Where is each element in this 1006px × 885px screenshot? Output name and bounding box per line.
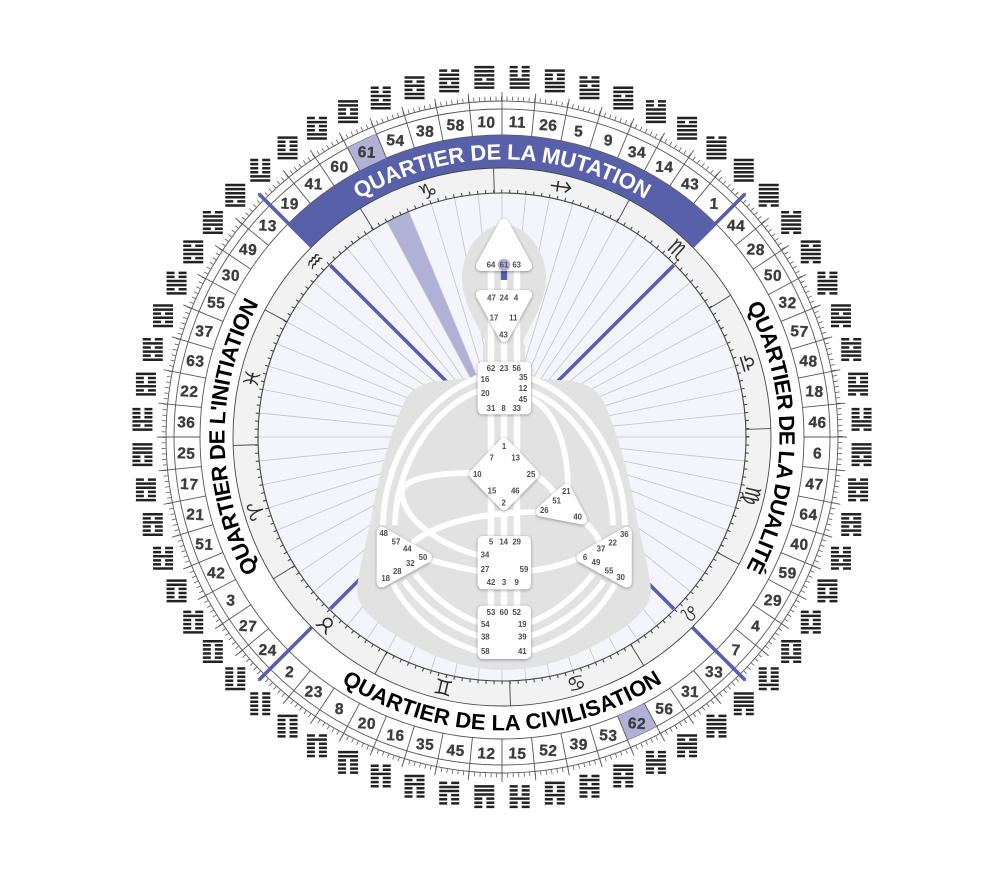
gate number ring: 59 <box>778 565 797 583</box>
hexagram 60 <box>307 118 327 138</box>
heading: quartier de la civilisation: QUARTIER DE LA CIVILISATION <box>344 670 662 730</box>
gate number ring: 54 <box>386 132 405 150</box>
center: throat: 8 <box>501 404 506 413</box>
inner radial lines <box>258 193 746 681</box>
hexagram 62 <box>646 752 666 773</box>
zodiac glyphs: ♊︎ <box>432 673 455 701</box>
center: ego: 26 <box>540 506 549 515</box>
gate number ring: 2 <box>285 664 295 681</box>
panel: mutation quarter band <box>288 135 716 247</box>
gate number ring: 24 <box>258 642 277 660</box>
hexagram 24 <box>225 669 245 689</box>
zodiac glyphs: ♐︎ <box>545 172 576 202</box>
gate number ring: 3 <box>226 592 236 610</box>
center: solar plexus <box>582 530 629 582</box>
center: G: 7 <box>490 453 494 462</box>
center: solar plexus: 55 <box>605 566 614 575</box>
zodiac sign boundaries <box>233 168 771 706</box>
hexagram 59 <box>817 581 837 601</box>
center: solar plexus: 37 <box>597 544 605 553</box>
hexagram 1 <box>734 160 754 181</box>
hexagram 6 <box>852 444 872 465</box>
center: spleen: 28 <box>393 567 402 576</box>
gate number ring: 20 <box>357 715 376 733</box>
hexagram 32 <box>817 273 837 293</box>
hexagram 35 <box>405 776 425 796</box>
hexagram 15 <box>510 786 530 807</box>
zodiac glyphs: ♌︎ <box>674 598 704 628</box>
gate number ring: 10 <box>477 114 496 132</box>
gate number ring: 17 <box>180 476 199 494</box>
gate number ring: 52 <box>539 742 558 760</box>
center: spleen: 57 <box>392 537 400 546</box>
body silhouette <box>357 224 651 670</box>
gate number ring: 12 <box>477 745 496 763</box>
gate number ring: 57 <box>790 323 809 341</box>
gate number ring: 50 <box>763 267 783 285</box>
hexagram 57 <box>831 305 851 326</box>
center: throat: 56 <box>512 364 522 373</box>
hexagram 56 <box>677 736 697 756</box>
center: G: 10 <box>473 470 482 479</box>
channels <box>383 260 625 651</box>
gate number ring: 60 <box>330 158 349 176</box>
hexagram 22 <box>136 374 156 394</box>
heading: quartier de la mutation: QUARTIER DE LA MUTATION <box>354 144 652 198</box>
center: spleen <box>379 529 428 583</box>
center: ego: 40 <box>573 512 583 521</box>
center: root: 38 <box>481 632 490 641</box>
gate number ring: 4 <box>751 618 761 635</box>
hexagram 49 <box>203 212 223 233</box>
zodiac glyphs: ♈︎ <box>242 499 271 524</box>
gate number ring: 47 <box>805 476 824 494</box>
zodiac glyphs: ♍︎ <box>738 484 766 507</box>
center: solar plexus: 6 <box>583 553 588 562</box>
gate number ring: 34 <box>627 144 647 162</box>
gate 61 activation <box>501 270 507 280</box>
center: ego <box>540 487 583 521</box>
center: sacral: 34 <box>481 550 490 559</box>
hexagram 18 <box>848 374 868 394</box>
hexagram 55 <box>167 273 187 293</box>
center: head: 64 <box>487 261 496 270</box>
gate number ring: 55 <box>207 294 226 312</box>
center: root: 19 <box>518 620 527 629</box>
center: root: 52 <box>512 608 522 617</box>
center: sacral: 42 <box>487 578 496 587</box>
gate number ring <box>177 114 827 763</box>
hexagram 5 <box>579 78 599 98</box>
gate number ring: 46 <box>808 414 827 432</box>
center: solar plexus: 30 <box>616 573 626 582</box>
gate number ring: 28 <box>746 241 765 259</box>
center: head: 63 <box>512 261 522 270</box>
hexagram 39 <box>579 776 599 796</box>
center: ajna: 11 <box>509 313 518 322</box>
heading: quartier de la dualité: QUARTIER DE LA DUALITÉ <box>746 302 795 575</box>
hexagram 63 <box>143 339 163 360</box>
hexagram 27 <box>203 641 223 662</box>
center: head: 61 <box>500 261 509 270</box>
zodiac ring <box>233 168 771 706</box>
gate number ring: 32 <box>778 294 797 312</box>
center: G: 13 <box>511 453 521 462</box>
hexagram 21 <box>143 514 163 535</box>
gate number ring: 48 <box>799 353 818 371</box>
gate number ring: 14 <box>655 158 674 176</box>
gate number ring: 62 <box>627 715 647 733</box>
zodiac glyphs: ♒︎ <box>300 246 330 276</box>
gate number ring: 11 <box>508 114 527 132</box>
center: root: 58 <box>481 647 490 656</box>
center: root: 60 <box>500 608 509 617</box>
inner disc <box>258 193 746 681</box>
hexagram 31 <box>706 716 726 736</box>
center: sacral <box>478 536 531 589</box>
zodiac glyphs <box>238 172 766 701</box>
gate number ring: 43 <box>681 176 700 194</box>
center: ajna: 4 <box>514 293 519 302</box>
hexagram 25 <box>132 444 152 465</box>
gate number ring: 6 <box>813 445 823 463</box>
hexagram 7 <box>759 669 779 689</box>
gate number ring: 36 <box>177 414 196 432</box>
hexagram 40 <box>831 548 851 569</box>
hexagram 14 <box>677 118 697 138</box>
hexagram 34 <box>646 101 666 122</box>
center: G: 15 <box>488 486 497 495</box>
hexagram 47 <box>848 480 868 500</box>
hexagram 61 <box>338 101 358 122</box>
hexagram 52 <box>545 783 565 803</box>
gate number ring: 64 <box>799 506 818 524</box>
center: throat: 23 <box>500 364 509 373</box>
hexagram 46 <box>852 409 872 430</box>
gate number ring: 13 <box>258 217 277 235</box>
gate number ring: 53 <box>599 727 618 745</box>
hexagram 17 <box>136 480 156 500</box>
hexagram ring <box>132 67 872 807</box>
gate number ring: 51 <box>195 536 214 554</box>
zodiac glyphs: ♎︎ <box>733 350 762 375</box>
center: sacral: 5 <box>489 537 494 546</box>
center: spleen: 32 <box>406 559 415 568</box>
center: ajna <box>481 293 527 339</box>
center: sacral: 59 <box>520 565 529 574</box>
center: root: 53 <box>487 608 496 617</box>
center: solar plexus: 22 <box>608 538 618 547</box>
gate number ring: 49 <box>239 241 258 259</box>
gate number ring: 25 <box>177 445 196 463</box>
center: throat: 31 <box>487 404 496 413</box>
zodiac glyphs: ♑︎ <box>415 177 440 206</box>
highlighted cell: gate 62 <box>615 702 657 741</box>
gate number ring: 35 <box>416 736 435 754</box>
hexagram 42 <box>167 581 187 601</box>
gate number ring: 31 <box>681 683 700 701</box>
center: G <box>473 442 536 507</box>
gate number ring: 40 <box>790 536 809 554</box>
center: solar plexus: 36 <box>620 530 629 539</box>
gate number ring: 61 <box>357 144 376 162</box>
hexagram 36 <box>132 409 152 430</box>
gate number ring: 63 <box>186 353 205 371</box>
hexagram 51 <box>153 548 173 569</box>
center: root: 54 <box>481 620 490 629</box>
hexagram 48 <box>841 339 861 360</box>
center: ego: 51 <box>552 496 562 505</box>
hexagram 4 <box>781 641 801 662</box>
hexagram 38 <box>405 78 425 98</box>
center: throat: 12 <box>519 384 528 393</box>
center: root: 39 <box>518 632 527 641</box>
hexagram 26 <box>545 71 565 91</box>
gate dividers <box>157 92 847 782</box>
gate 61 wedge <box>387 212 502 437</box>
gate number ring: 18 <box>805 383 824 401</box>
hexagram 45 <box>439 783 459 803</box>
center: sacral: 3 <box>502 578 507 587</box>
gate number ring: 19 <box>280 195 299 213</box>
center: G: 1 <box>502 442 507 451</box>
gate number ring: 37 <box>195 323 214 341</box>
center: root <box>478 606 531 659</box>
gate number ring: 5 <box>574 123 584 141</box>
center: throat: 20 <box>481 389 490 398</box>
gate number ring: 27 <box>239 618 258 636</box>
center: G: 46 <box>511 486 520 495</box>
center: sacral: 9 <box>515 578 520 587</box>
hexagram 19 <box>250 160 270 181</box>
gate number ring: 45 <box>446 742 465 760</box>
zodiac glyphs: ♓︎ <box>238 367 266 390</box>
hexagram 53 <box>613 766 633 786</box>
center: sacral: 14 <box>499 537 509 546</box>
hexagram 43 <box>706 138 726 158</box>
hexagram 64 <box>841 514 861 535</box>
hexagram 16 <box>371 766 391 786</box>
hexagram 50 <box>801 242 821 262</box>
hexagram 28 <box>781 212 801 233</box>
center: sacral: 29 <box>512 537 522 546</box>
gate number ring: 15 <box>508 745 527 763</box>
center: ajna: 17 <box>490 313 498 322</box>
quarter boundary lines, inner <box>330 265 674 609</box>
center: throat: 33 <box>512 404 522 413</box>
center: throat: 62 <box>487 364 496 373</box>
hexagram 9 <box>613 88 633 108</box>
center: spleen: 50 <box>419 553 428 562</box>
center: spleen: 48 <box>379 529 389 538</box>
hexagram 23 <box>278 716 298 736</box>
center: G: 25 <box>527 470 536 479</box>
center: throat <box>478 362 531 414</box>
center: ego: 21 <box>562 487 571 496</box>
zodiac glyphs: ♉︎ <box>311 609 341 639</box>
hexagram 33 <box>734 693 754 714</box>
gate number ring: 8 <box>334 701 344 718</box>
hexagram 20 <box>338 752 358 773</box>
gate number ring: 21 <box>186 506 205 524</box>
hexagram 3 <box>183 612 203 632</box>
zodiac glyphs: ♏︎ <box>663 235 693 265</box>
center: ajna: 43 <box>499 330 508 339</box>
inner ring circle and ticks <box>256 191 748 683</box>
hexagram 30 <box>183 242 203 262</box>
gate number ring: 30 <box>221 267 240 285</box>
gate number ring: 44 <box>727 217 746 235</box>
gate number ring: 33 <box>705 664 724 682</box>
center: G: 2 <box>502 498 507 507</box>
zodiac glyphs: ♋︎ <box>564 668 589 697</box>
center: solar plexus: 49 <box>592 558 601 567</box>
hexagram 2 <box>250 693 270 714</box>
hexagram 41 <box>278 138 298 158</box>
gate number ring: 22 <box>180 383 199 401</box>
hexagram 58 <box>439 71 459 91</box>
center: root: 41 <box>518 647 527 656</box>
gate number ring: 42 <box>207 565 226 583</box>
gate number ring: 39 <box>569 736 588 754</box>
hexagram 13 <box>225 185 245 205</box>
gate number ring: 26 <box>539 117 558 135</box>
hexagram 8 <box>307 736 327 756</box>
center: throat: 45 <box>519 395 528 404</box>
center: throat: 35 <box>519 373 528 382</box>
gate number ring: 9 <box>603 132 613 150</box>
hexagram 29 <box>801 612 821 632</box>
gate number ring: 38 <box>416 123 435 141</box>
gate number ring: 16 <box>386 727 405 745</box>
quarter boundary lines, outer <box>259 194 745 680</box>
gate number ring: 56 <box>655 701 674 719</box>
center: ajna: 47 <box>487 293 496 302</box>
hexagram 54 <box>371 88 391 108</box>
center: head <box>481 224 527 271</box>
gate number ring: 7 <box>731 642 741 659</box>
center: throat: 16 <box>481 375 490 384</box>
hexagram 10 <box>474 67 494 88</box>
hexagram 37 <box>153 305 173 326</box>
gate number ring: 23 <box>304 683 323 701</box>
gate number ring: 1 <box>709 196 719 213</box>
center: spleen: 18 <box>381 574 391 583</box>
gate number ring: 41 <box>304 176 323 194</box>
center: ajna: 24 <box>500 293 509 302</box>
hexagram 44 <box>759 185 779 205</box>
highlighted cell: gate 61 <box>347 133 389 172</box>
gate number ring: 29 <box>763 592 783 610</box>
center: spleen: 44 <box>403 545 412 554</box>
outer ring circles and ticks <box>164 98 840 776</box>
hexagram 11 <box>510 67 530 88</box>
gate number ring: 58 <box>446 117 465 135</box>
center: sacral: 27 <box>481 565 489 574</box>
hexagram 12 <box>474 786 494 807</box>
heading: quartier de l'initiation: QUARTIER DE L'INITIATION <box>209 298 258 574</box>
